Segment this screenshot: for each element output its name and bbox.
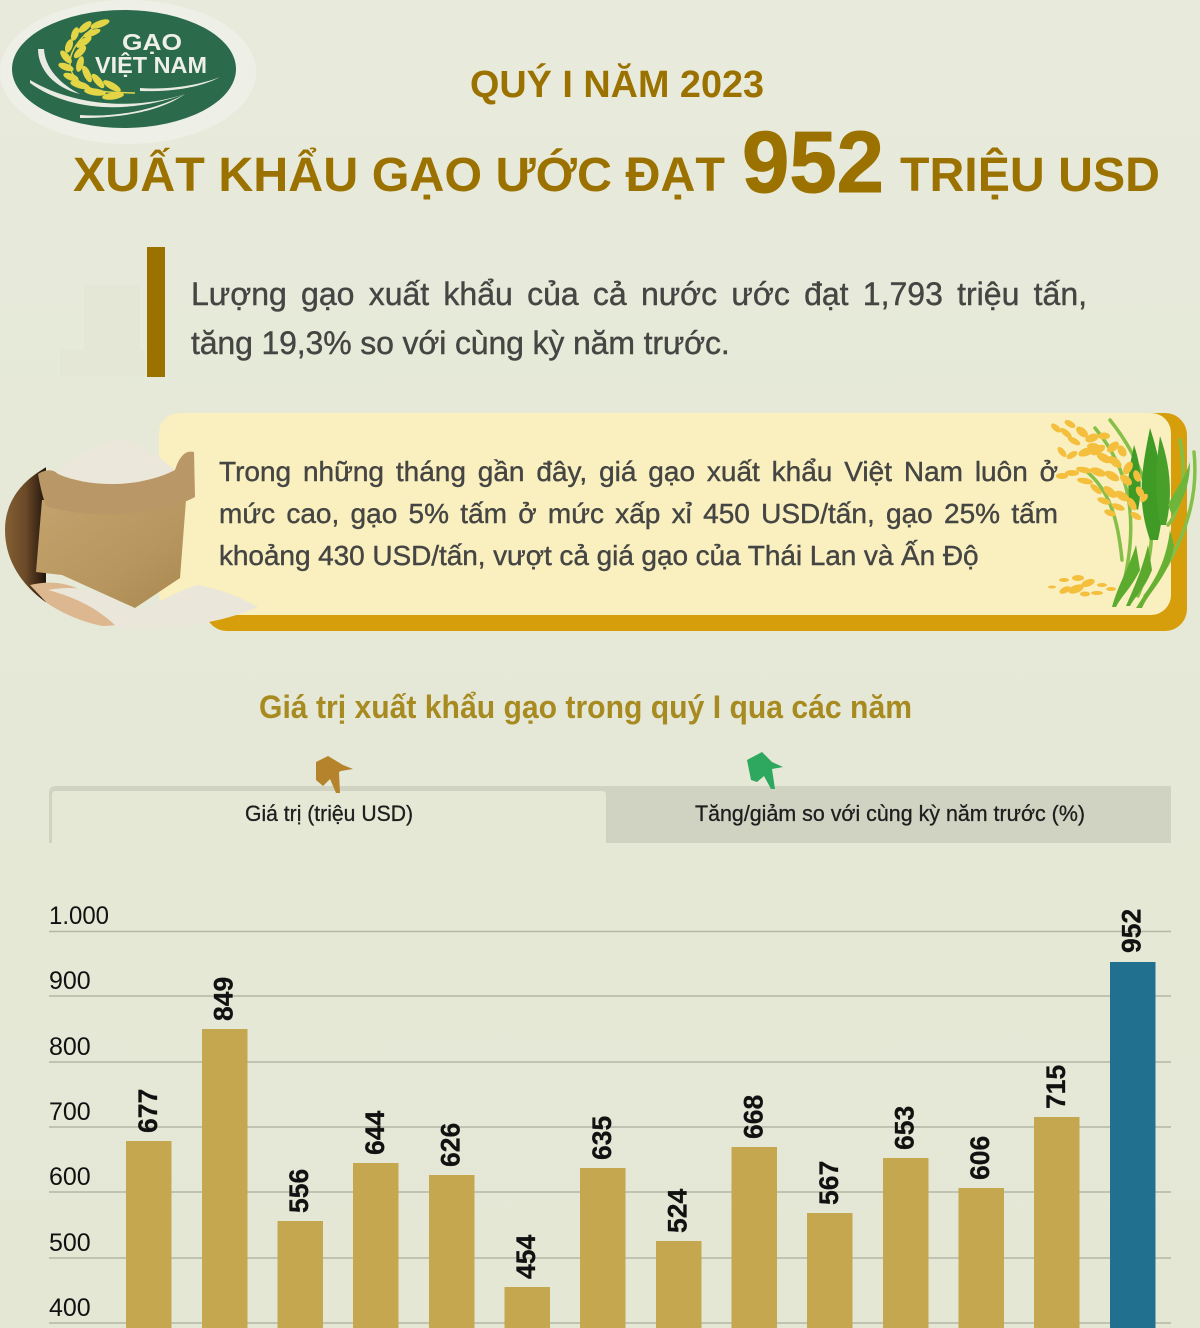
callout text: mức cao, gạo 5% tấm ở mức xấp xỉ 450 USD/tấn, gạo 25% tấm xyxy=(219,498,1058,529)
intro text xyxy=(191,276,1087,361)
value labels: 677 xyxy=(133,1089,163,1133)
value labels: 952 xyxy=(1116,909,1146,953)
y axis labels: 500 xyxy=(49,1229,91,1257)
rice heap xyxy=(159,458,175,476)
main title: 952 xyxy=(742,114,884,211)
value labels: 715 xyxy=(1041,1065,1071,1109)
value labels: 644 xyxy=(360,1111,390,1155)
y axis labels: 1.000 xyxy=(49,902,109,930)
title line 1: QUÝ I NĂM 2023 xyxy=(470,62,764,106)
bar chart xyxy=(49,902,1171,1328)
logo wheat xyxy=(57,17,135,101)
callout text: khoảng 430 USD/tấn, vượt cả giá gạo của Thái Lan và Ấn Độ xyxy=(219,540,979,571)
y axis labels xyxy=(49,902,109,1322)
value labels: 454 xyxy=(511,1235,541,1279)
faint watermark xyxy=(60,285,145,376)
icon: rice plant xyxy=(1048,418,1195,608)
logo: Gạo Việt Nam xyxy=(0,0,256,144)
main title: TRIỆU USD xyxy=(900,147,1160,202)
y axis labels: 900 xyxy=(49,967,91,995)
sack rim xyxy=(38,452,195,514)
tabs xyxy=(49,786,1171,843)
y axis labels: 700 xyxy=(49,1098,91,1126)
value labels: 653 xyxy=(890,1106,920,1150)
value labels: 668 xyxy=(738,1095,768,1139)
bars xyxy=(126,962,1156,1328)
intro text: Lượng gạo xuất khẩu của cả nước ước đạt 1,793 triệu tấn, xyxy=(191,276,1087,312)
intro text: tăng 19,3% so với cùng kỳ năm trước. xyxy=(191,325,730,361)
logo: Gạo Việt Nam: VIỆT NAM xyxy=(95,51,207,78)
intro accent bar xyxy=(147,247,165,377)
y axis labels: 800 xyxy=(49,1033,91,1061)
spilled rice xyxy=(48,585,258,628)
icon: rice sack xyxy=(0,440,258,628)
rice grains xyxy=(1048,418,1150,596)
value labels: 635 xyxy=(587,1116,617,1160)
logo wordmark: GẠO xyxy=(122,29,182,55)
sack body xyxy=(36,500,186,608)
value labels: 849 xyxy=(208,977,238,1021)
value labels: 626 xyxy=(436,1123,466,1167)
value labels: 524 xyxy=(662,1189,692,1233)
scoop xyxy=(30,583,120,628)
logo swooshes xyxy=(30,49,220,118)
main title: XUẤT KHẨU GẠO ƯỚC ĐẠT xyxy=(73,147,725,202)
main title xyxy=(73,114,1160,211)
callout box xyxy=(159,413,1187,631)
callout text xyxy=(219,456,1058,572)
tab: change: Tăng/giảm so với cùng kỳ năm trước (%) xyxy=(695,801,1085,826)
icon: pointing hand, green xyxy=(747,752,783,789)
y axis labels: 400 xyxy=(49,1294,91,1322)
tab: value: Giá trị (triệu USD) xyxy=(245,801,413,826)
callout text: Trong những tháng gần đây, giá gạo xuất khẩu Việt Nam luôn ở xyxy=(219,456,1058,487)
chart heading: Giá trị xuất khẩu gạo trong quý I qua các năm xyxy=(259,689,912,725)
value labels: 567 xyxy=(814,1161,844,1205)
rice stems and leaves xyxy=(1085,420,1195,596)
y axis labels: 600 xyxy=(49,1163,91,1191)
value labels xyxy=(133,909,1146,1279)
icon: pointing hand, brown xyxy=(316,756,353,793)
value labels: 556 xyxy=(284,1169,314,1213)
value labels: 606 xyxy=(965,1136,995,1180)
